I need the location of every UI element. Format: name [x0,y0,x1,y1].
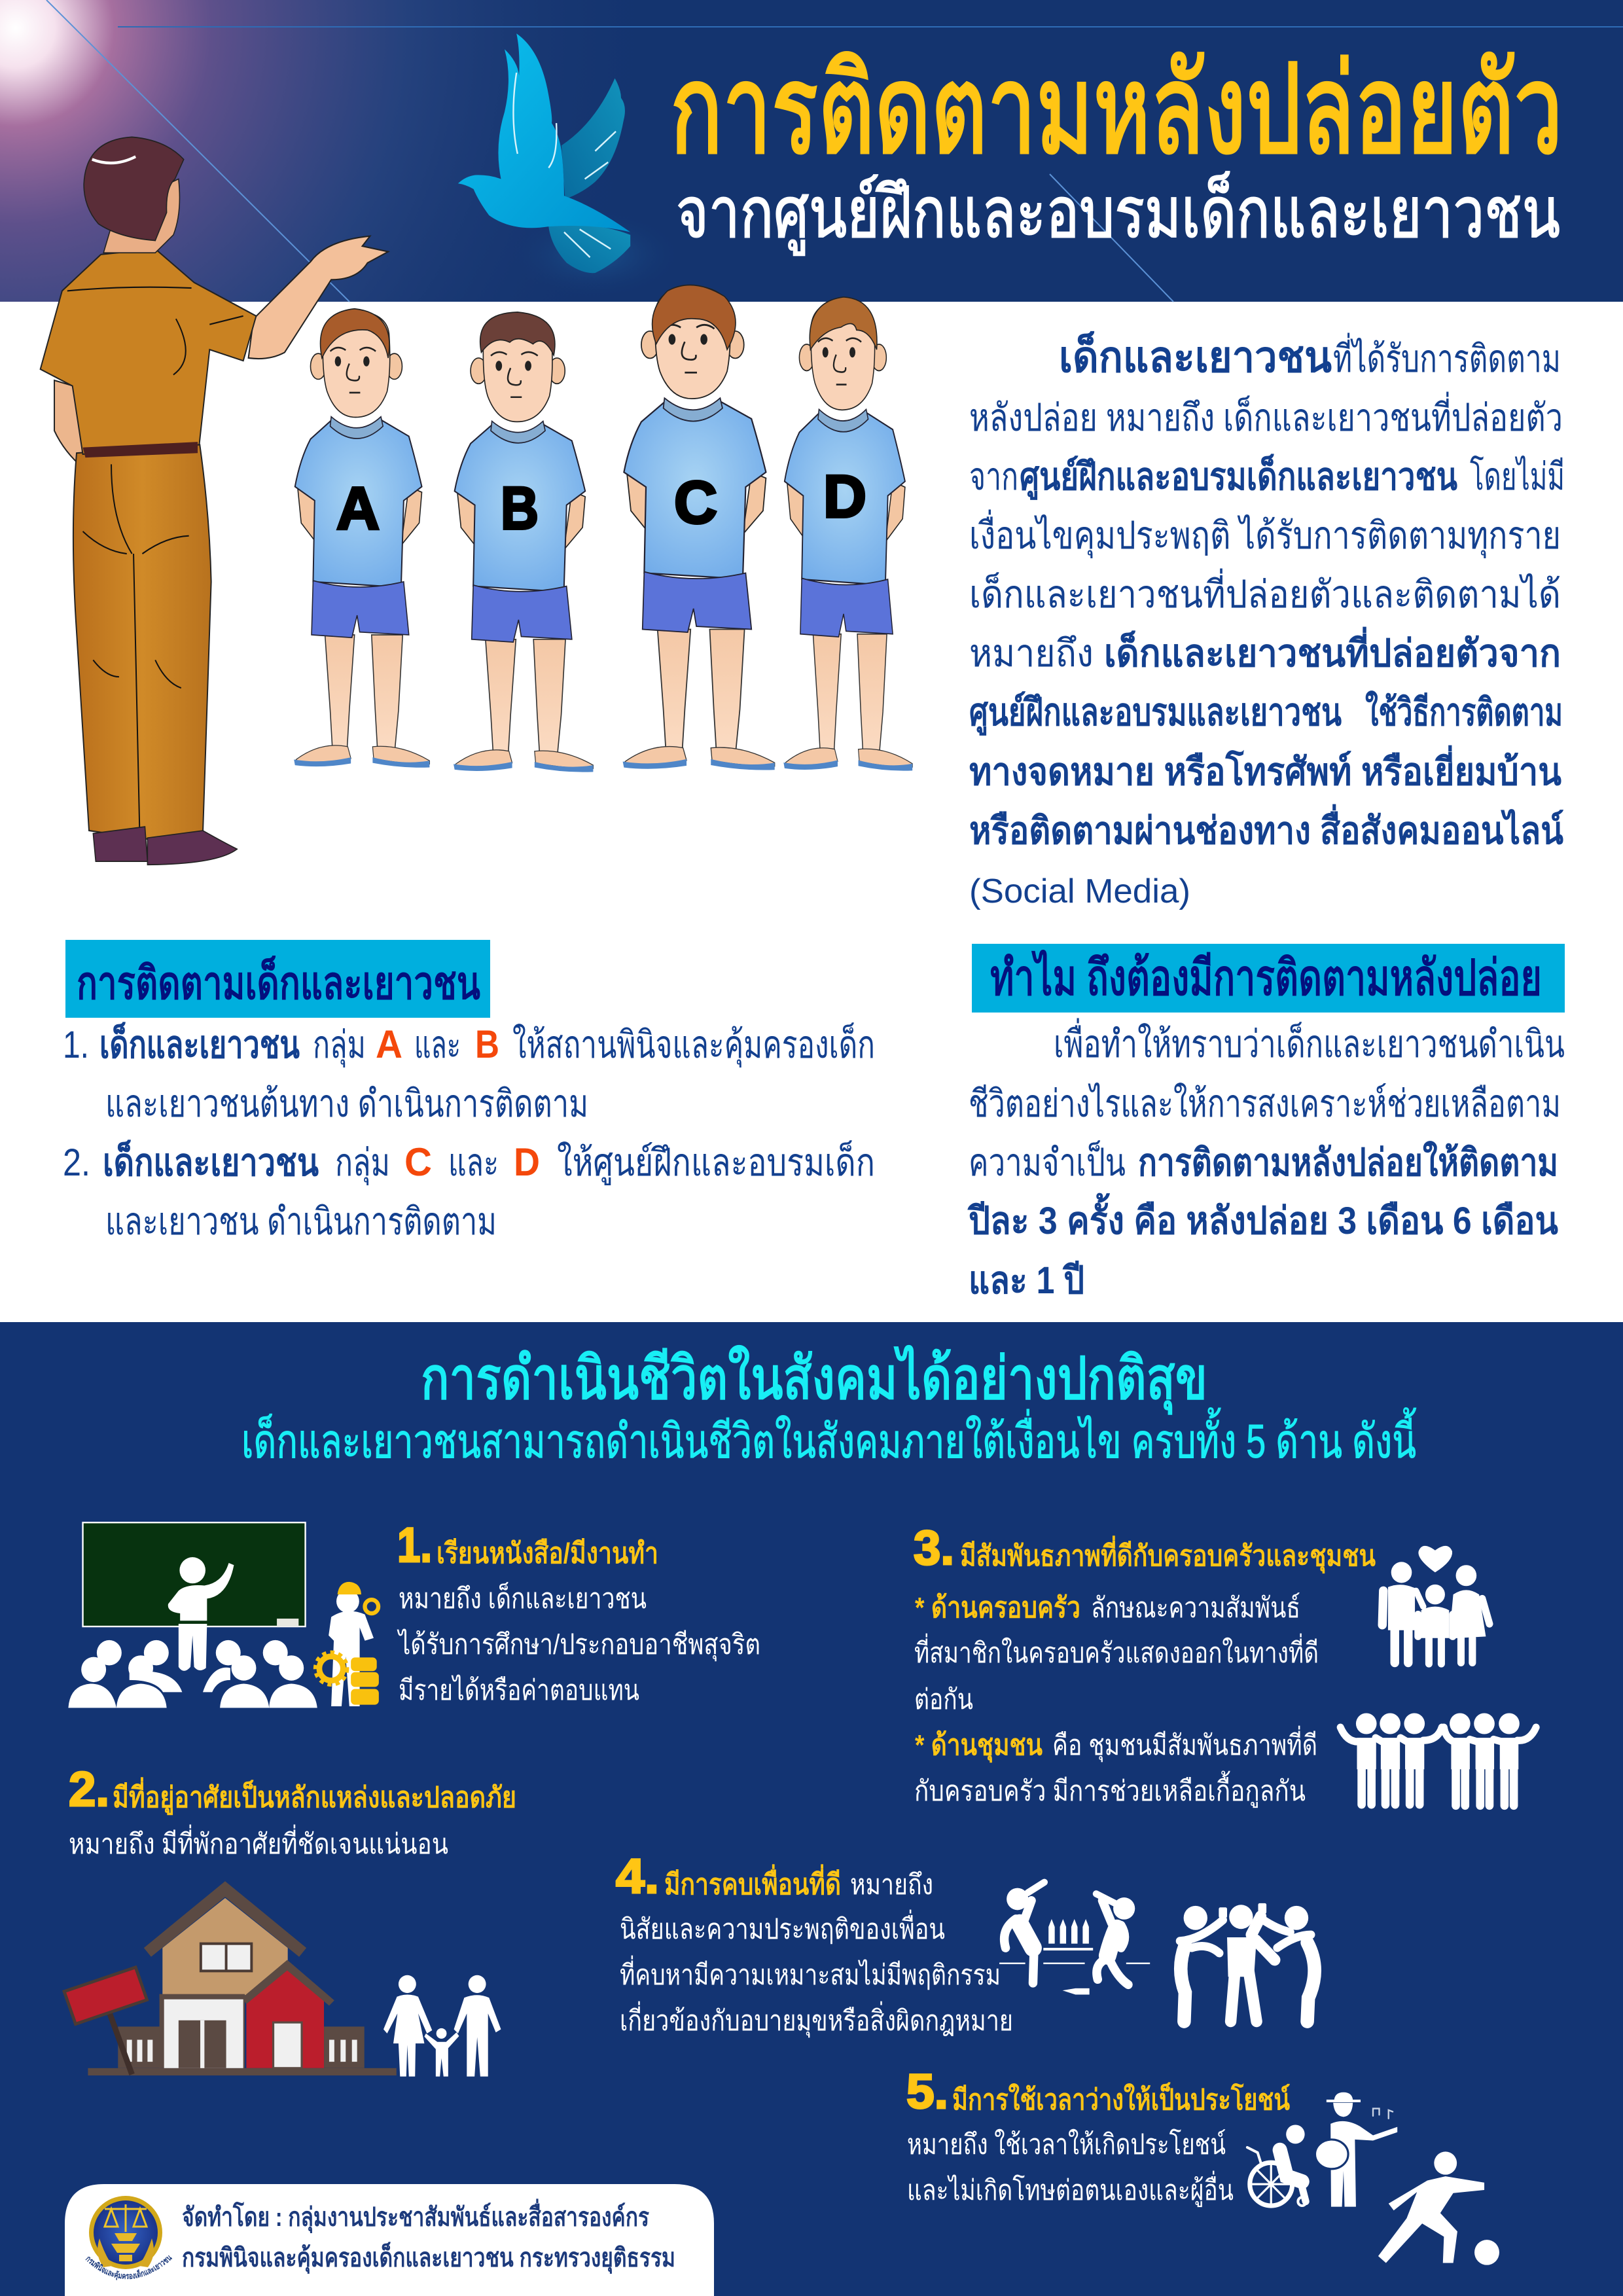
icon: community group [1340,1713,1536,1806]
text block: why follow up [967,1018,1565,1302]
item 3: family and community relations: 3. [914,1520,954,1575]
text block: definition [969,331,1565,910]
item 2: safe housing: หมายถึง มีที่พักอาศัยที่ชัดเจนแน่นอน [69,1825,448,1860]
list: follow-up groups: B [475,1022,499,1066]
text block: definition: (Social Media) [969,872,1190,910]
heading box: follow-up groups: การติดตามเด็กและเยาวชน [77,956,480,1009]
panel: lower navy section [0,1322,1623,2296]
list: follow-up groups: และเยาวชน ดำเนินการติดตาม [105,1200,497,1243]
list: follow-up groups: ให้สถานพินิจและคุ้มครองเด็ก [512,1022,875,1068]
item 5: use free time [906,2064,1290,2208]
icon: drinking figures [999,1882,1150,1994]
list: follow-up groups: D [514,1140,540,1184]
illustration: boy D [783,297,912,771]
text block: why follow up: ความจำเป็น [969,1140,1126,1184]
item 3: family and community relations [914,1520,1376,1808]
heading box: follow-up groups [65,940,490,1018]
list: follow-up groups: เด็กและเยาวชน [99,1022,300,1066]
item 2: safe housing: มีที่อยู่อาศัยเป็นหลักแหล่งและปลอดภัย [113,1777,516,1815]
text block: definition: เด็กและเยาวชนที่ปล่อยตัวจาก [1104,626,1561,675]
item 4: good friends [616,1849,1013,2038]
item 1: study or work: ได้รับการศึกษา/ประกอบอาชีพสุจริต [397,1628,760,1662]
header banner background [0,0,1623,302]
section heading: การดำเนินชีวิตในสังคมได้อย่างปกติสุข [421,1346,1207,1414]
icon: family with heart [1382,1546,1489,1664]
item 3: family and community relations: ต่อกัน [914,1684,973,1715]
list: follow-up groups: 1. [63,1024,89,1066]
item 3: family and community relations: * ด้านครอบครัว [915,1592,1080,1624]
item 3: family and community relations: ที่สมาชิกในครอบครัวแสดงออกในทางที่ดี [914,1634,1319,1669]
illustration: boy C [623,285,775,770]
illustration: boy A [294,309,429,768]
footer text [182,2198,675,2274]
item 3: family and community relations: * ด้านชุมชน [915,1729,1043,1763]
item 1: study or work: มีรายได้หรือค่าตอบแทน [399,1674,639,1706]
text block: definition: หมายถึง [969,632,1094,675]
item 5: use free time: หมายถึง ใช้เวลาให้เกิดประโยชน์ [907,2128,1226,2161]
icon: blue dove [458,33,683,299]
item 5: use free time: และไม่เกิดโทษต่อตนเองและผู้อื่น [907,2171,1234,2208]
icon: classroom and worker [68,1522,379,1708]
letter A: A [336,475,380,542]
item 3: family and community relations: คือ ชุมชนมีสัมพันธภาพที่ดี [1052,1726,1317,1763]
item 5: use free time: มีการใช้เวลาว่างให้เป็นประโยชน์ [952,2082,1290,2116]
footer text: จัดทำโดย : กลุ่มงานประชาสัมพันธ์และสื่อสารองค์กร [182,2198,649,2234]
icon: wheelchair, guitarist, football player [1247,2092,1499,2265]
item 4: good friends: นิสัยและความประพฤติของเพื่อน [620,1910,945,1945]
list: follow-up groups: และเยาวชนต้นทาง ดำเนินการติดตาม [105,1083,588,1125]
list: follow-up groups [63,1022,875,1243]
list: follow-up groups: C [404,1140,432,1184]
item 3: family and community relations: ลักษณะความสัมพันธ์ [1091,1592,1300,1624]
item 3: family and community relations: มีสัมพันธภาพที่ดีกับครอบครัวและชุมชน [960,1535,1376,1574]
icon: department seal: กรมพินิจและคุ้มครองเด็กและเยาวชน [85,2255,172,2280]
text block: definition: ศูนย์ฝึกและอบรมเด็กและเยาวชน [1020,454,1457,500]
item 5: use free time: 5. [906,2064,948,2119]
list: follow-up groups: เด็กและเยาวชน [103,1139,319,1184]
text block: definition: ที่ได้รับการติดตาม [1333,332,1561,380]
item 3: family and community relations: กับครอบครัว มีการช่วยเหลือเกื้อกูลกัน [914,1770,1306,1808]
icon: friends toasting [1180,1903,1315,2021]
item 1: study or work: 1. [397,1518,432,1572]
letter B: B [501,475,539,542]
text block: definition: เด็กและเยาวชนที่ปล่อยตัวและติดตามได้ [969,568,1561,616]
list: follow-up groups: และ [448,1141,499,1184]
item 4: good friends: 4. [616,1849,659,1903]
item 2: safe housing: 2. [69,1762,109,1816]
illustration: officer seen from behind [41,137,388,865]
item 1: study or work [397,1518,760,1706]
list: follow-up groups: และ [414,1024,461,1066]
letter C: C [674,469,717,536]
item 1: study or work: เรียนหนังสือ/มีงานทำ [437,1537,658,1570]
list: follow-up groups: A [376,1022,402,1066]
icon: house with family [64,1881,501,2077]
text block: why follow up: และ 1 ปี [969,1259,1084,1302]
panel: footer credit [65,2184,714,2296]
item 4: good friends: เกี่ยวข้องกับอบายมุขหรือสิ่งผิดกฎหมาย [620,2001,1013,2038]
list: follow-up groups: กลุ่ม [313,1024,366,1068]
letter D: D [823,463,866,530]
item 2: safe housing [69,1762,516,1860]
list: follow-up groups: 2. [63,1141,90,1184]
text block: definition: ทางจดหมาย หรือโทรศัพท์ หรือเยี่ยมบ้าน [969,745,1561,793]
text block: why follow up: ปีละ 3 ครั้ง คือ หลังปล่อย 3 เดือน 6 เดือน [967,1193,1558,1242]
text block: definition: เด็กและเยาวชน [1059,331,1332,381]
item 4: good friends: มีการคบเพื่อนที่ดี [664,1864,841,1901]
text block: definition: ศูนย์ฝึกและอบรมและเยาวชน [969,691,1342,736]
illustration: boy B [454,312,593,772]
text block: definition: จาก [969,456,1018,498]
list: follow-up groups: กลุ่ม [335,1141,390,1186]
list: follow-up groups: ให้ศูนย์ฝึกและอบรมเด็ก [557,1140,875,1185]
item 4: good friends: หมายถึง [850,1869,933,1901]
footer text: กรมพินิจและคุ้มครองเด็กและเยาวชน กระทรวงยุติธรรม [182,2241,675,2274]
item 1: study or work: หมายถึง เด็กและเยาวชน [399,1582,647,1615]
icon: department seal [85,2196,172,2280]
item 4: good friends: ที่คบหามีความเหมาะสมไม่มีพฤติกรรม [620,1956,1001,1991]
text block: definition: โดยไม่มี [1470,455,1565,498]
